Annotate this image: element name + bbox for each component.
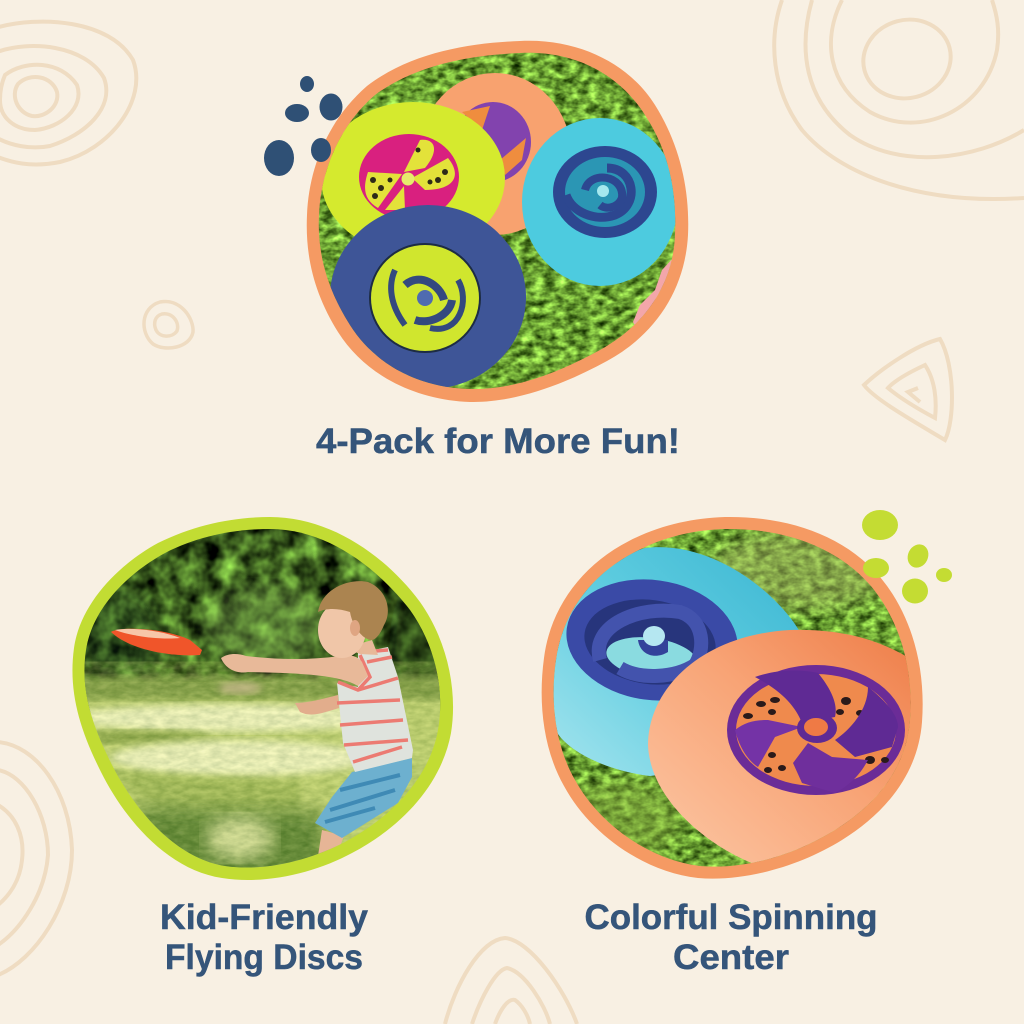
heading: kid-friendly: Kid-Friendly — [160, 898, 369, 937]
child: head — [318, 581, 388, 658]
heading: colorful centre: Colorful Spinning — [584, 898, 878, 937]
photo: grass — [318, 52, 676, 389]
child: neck — [356, 640, 378, 655]
photo: foliage — [70, 520, 450, 695]
disc: cyan — [522, 118, 678, 286]
photo: lawn — [65, 676, 450, 887]
photo frame: kid throwing — [65, 517, 453, 887]
disc: lime — [322, 102, 505, 236]
disc: orange — [648, 630, 915, 868]
child: shirt — [337, 647, 413, 772]
decorative contour rings: top right — [774, 0, 1024, 199]
decorative contour rings: top left — [0, 22, 136, 164]
navy dots — [264, 76, 342, 176]
photo frame: spinning centre — [540, 517, 923, 880]
disc: cyan — [552, 547, 800, 776]
disc: orange — [435, 73, 566, 235]
background blush stones — [218, 682, 262, 694]
child: back arm — [295, 695, 339, 715]
decorative triangle spiral — [864, 339, 952, 440]
decorative rings: left bottom — [0, 742, 72, 975]
photo: grass — [554, 529, 911, 867]
decorative rings: bottom centre — [445, 938, 577, 1024]
heading: kid-friendly: Flying Discs — [165, 938, 363, 977]
decorative small ring — [144, 301, 193, 348]
child: throwing arm — [221, 654, 368, 686]
heading: colorful centre: Center — [673, 938, 789, 977]
child: leg — [318, 830, 344, 856]
child: shorts — [315, 758, 412, 838]
heading: kid-friendly — [160, 898, 369, 977]
photo frame: four-pack — [300, 40, 700, 402]
pink towel — [633, 259, 672, 324]
disc in flight — [111, 629, 202, 655]
disc: navy — [330, 205, 526, 389]
lime dots — [862, 510, 952, 604]
heading: colorful centre — [584, 898, 878, 977]
heading: 4-pack: 4-Pack for More Fun! — [316, 422, 680, 461]
